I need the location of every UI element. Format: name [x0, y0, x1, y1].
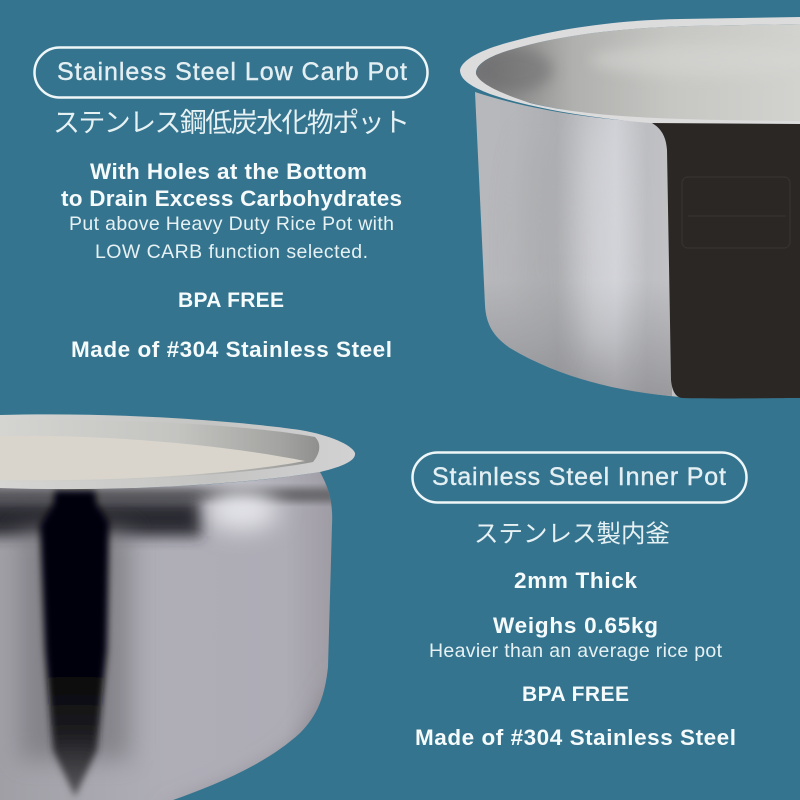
- rim: [460, 17, 800, 124]
- heading pill: inner pot: [412, 452, 746, 502]
- feature: BPA free: BPA FREE: [178, 289, 284, 312]
- icon: stainless steel low carb pot photo: [460, 17, 800, 400]
- feature: material: Made of #304 Stainless Steel: [71, 337, 392, 362]
- feature: holes: to Drain Excess Carbohydrates: [61, 186, 402, 211]
- feature: thickness: 2mm Thick: [514, 568, 637, 593]
- usage note: Put above Heavy Duty Rice Pot with: [69, 213, 394, 235]
- inner wall: [0, 420, 319, 482]
- Japanese heading: ステンレス製内釜: [474, 520, 670, 548]
- usage note: [69, 213, 394, 263]
- usage note: LOW CARB function selected.: [95, 241, 368, 263]
- heading pill: inner pot: Stainless Steel Inner Pot: [432, 463, 726, 491]
- Japanese heading: ステンレス鋼低炭水化物ポット: [53, 108, 410, 138]
- rim: [0, 414, 355, 489]
- panel: low carb pot text: [34, 48, 428, 362]
- reflections: [0, 488, 360, 800]
- feature: weight: Heavier than an average rice pot: [429, 640, 723, 662]
- embossed label: [682, 177, 790, 248]
- black band: [650, 122, 800, 398]
- panel: inner pot text: [412, 452, 746, 750]
- body shading: [486, 211, 672, 396]
- interior shading: [482, 46, 702, 94]
- feature: weight: [429, 613, 723, 662]
- heading pill: low carb pot: [34, 48, 428, 98]
- pot body: [0, 472, 332, 800]
- pot interior: [0, 436, 305, 480]
- feature: material: Made of #304 Stainless Steel: [415, 725, 736, 750]
- heading pill: low carb pot: Stainless Steel Low Carb Pot: [57, 58, 407, 86]
- pot body: [475, 92, 800, 398]
- feature: weight: Weighs 0.65kg: [493, 613, 658, 638]
- feature: holes: [61, 159, 402, 211]
- feature: holes: With Holes at the Bottom: [90, 159, 367, 184]
- icon: stainless steel inner pot photo: [0, 414, 360, 800]
- feature: BPA free: BPA FREE: [522, 683, 629, 706]
- pot interior: [476, 24, 800, 122]
